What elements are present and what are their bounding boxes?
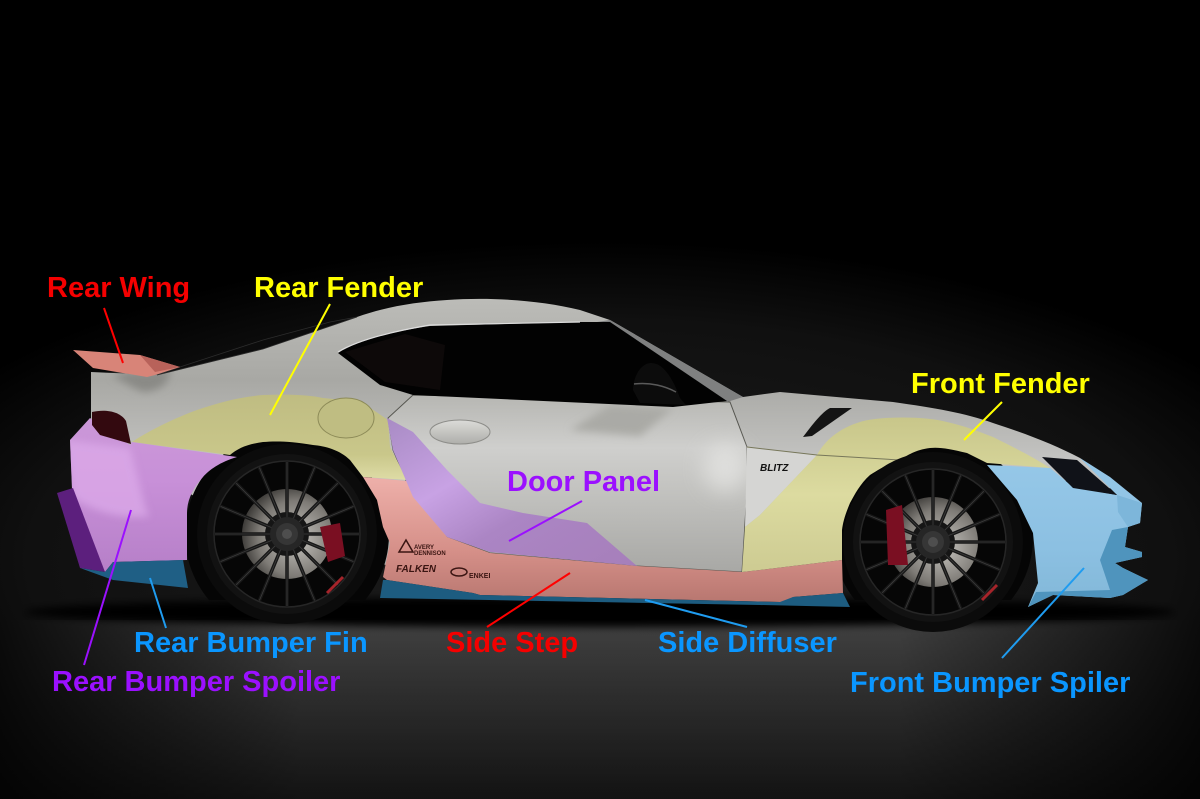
line: front bumper spoiler [1002,568,1084,658]
label: side diffuser: Side Diffuser [658,627,837,659]
label: rear fender: Rear Fender [254,272,423,304]
body shell [91,299,1120,570]
dark purple side fin [57,488,105,572]
front wheel [843,452,1023,632]
fender seam [747,447,900,460]
dennison text: DENNISON [414,551,446,557]
leader lines [84,304,1084,665]
rear wing panel [73,350,180,377]
label: rear bumper spoiler: Rear Bumper Spoiler [52,666,340,698]
headlight [1042,457,1117,495]
door shadow [570,405,673,436]
side mirror [633,363,686,405]
line: rear wing [104,308,123,363]
door skin [388,395,747,572]
line: side step [487,573,570,627]
avery triangle [399,540,413,552]
label: front bumper spiler: Front Bumper Spiler [850,667,1130,699]
front bumper spoiler panel [987,457,1148,607]
label: door panel: Door Panel [507,466,660,498]
rear fender panel [132,395,407,480]
tail light [92,411,131,444]
side step panel [363,477,843,602]
interior tint [345,334,445,390]
bumper upper shade [1117,495,1142,527]
line: side diffuser [645,600,747,627]
falken text: FALKEN [396,564,437,575]
bumper highlight [65,440,150,517]
mirror shine [634,383,676,392]
line: door panel [509,501,582,541]
window frame shine [338,322,580,352]
infographic: car aero parts diagram [0,276,1200,799]
line: rear bumper spoiler [84,510,131,665]
rear bumper spoiler panel [57,418,237,572]
front quarter highlight [745,447,817,527]
enkei text: ENKEI [469,573,490,580]
line: rear bumper fin [150,578,166,628]
side diffuser panel [380,580,850,607]
front fender panel [742,418,1050,572]
rear bumper fin panel [80,560,188,588]
line: rear fender [270,304,330,415]
label: front fender: Front Fender [911,368,1090,400]
label: rear bumper fin: Rear Bumper Fin [134,627,368,659]
door handle [430,420,490,444]
rear brake caliper [320,523,345,562]
label: rear wing: Rear Wing [47,272,190,304]
front wheel arch shadow [833,437,1033,600]
enkei symbol [451,568,467,576]
line: front fender [964,402,1002,440]
label: side step: Side Step [446,627,578,659]
door panel [387,418,637,566]
front brake caliper [886,505,908,565]
bumper intake shade [1028,527,1148,607]
door highlight [703,444,747,492]
sponsor logos [396,540,490,580]
blitz logo: BLITZ [760,463,789,474]
avery dennison logo: AVERY [414,545,434,551]
car body [91,299,1120,600]
front rim stripe [982,585,997,600]
black roof spoiler strip [157,317,357,375]
rear wheel arch shadow [185,432,389,600]
side window [338,322,727,407]
rear wheel [197,444,377,624]
hood vent [803,408,852,437]
rear rim stripe [327,577,343,593]
fuel door [318,398,374,438]
rear deck shading [112,370,172,392]
labels [47,272,1130,699]
A-pillar [597,320,743,402]
